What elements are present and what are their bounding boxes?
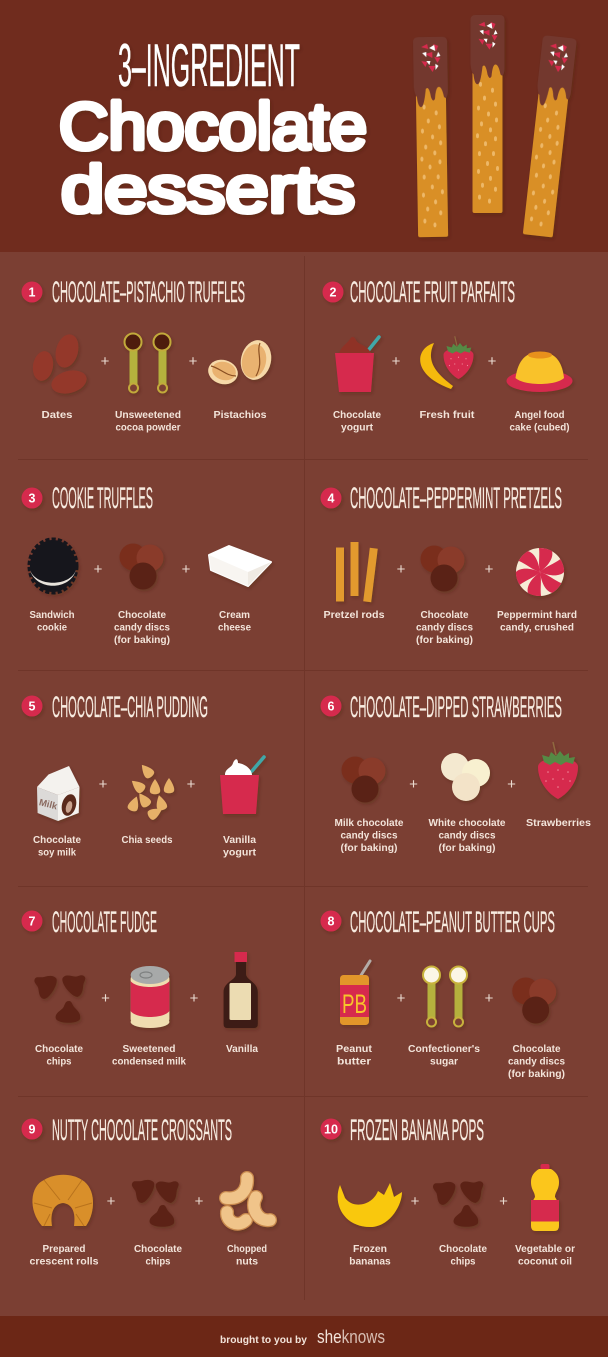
icon: vanilla yogurt: [220, 757, 264, 814]
label: milk chocolate candy discs: (for baking): [340, 842, 398, 854]
label: unsweetened cocoa powder: Unsweetened: [115, 409, 181, 421]
label: strawberries: Strawberries: [526, 817, 591, 829]
label: chocolate candy discs: candy discs: [416, 622, 473, 634]
icon: sugar spoons: [423, 966, 467, 1026]
icon: chocolate chips: [427, 1172, 490, 1227]
plus: +: [99, 776, 108, 793]
plus: +: [195, 1193, 204, 1210]
label: unsweetened cocoa powder: cocoa powder: [116, 422, 180, 434]
label: chia seeds: Chia seeds: [122, 834, 173, 846]
label: prepared crescent rolls: crescent rolls: [30, 1256, 99, 1268]
label: chocolate candy discs: (for baking): [508, 1068, 565, 1080]
label: sweetened condensed milk: [112, 1043, 186, 1068]
label: chocolate candy discs: candy discs: [114, 622, 170, 634]
panel: recipe 10: [320, 1114, 575, 1268]
badge 4: [320, 488, 342, 508]
icon: dates: [31, 332, 89, 397]
label: vegetable or coconut oil: [515, 1243, 575, 1268]
label: chocolate chips: [439, 1243, 487, 1268]
icon: milk carton: Milk: [38, 797, 59, 813]
text: NUTTY CHOCOLATE CROISSANTS: [52, 1114, 232, 1147]
label: fresh fruit: Fresh fruit: [420, 409, 475, 421]
icon: pretzel rods: [336, 542, 378, 602]
panel: recipe 1: [22, 276, 275, 434]
label: sweetened condensed milk: condensed milk: [112, 1056, 186, 1068]
panel: recipe 2: [322, 276, 572, 434]
label: chocolate candy discs: [114, 609, 170, 646]
label: chocolate soy milk: [33, 834, 81, 858]
icon: cashews: [226, 1178, 270, 1224]
label: chopped nuts: Chopped: [227, 1243, 267, 1255]
label: peppermint hard candy: candy, crushed: [500, 622, 574, 634]
label: angel food cake: cake (cubed): [510, 422, 570, 434]
icon: angel food cake: [506, 352, 572, 392]
footer credit: brought to you by: [220, 1334, 307, 1346]
plus: +: [107, 1193, 116, 1210]
plus: +: [101, 353, 110, 370]
icon: peanut butter jar: PB: [342, 989, 367, 1019]
panel: recipe 8: [320, 906, 565, 1080]
panel: recipe 9: [22, 1114, 270, 1268]
label: angel food cake: [510, 409, 570, 434]
label: chocolate candy discs: Chocolate: [512, 1043, 561, 1055]
icon: pistachios: [205, 337, 275, 387]
label: unsweetened cocoa powder: [115, 409, 181, 434]
badge 4: 4: [328, 492, 335, 506]
panel: header: [0, 0, 608, 252]
label: prepared crescent rolls: [30, 1243, 99, 1268]
label: chocolate chips: Chocolate: [134, 1243, 182, 1255]
icon: banana and strawberry: [420, 336, 474, 389]
label: vegetable or coconut oil: Vegetable or: [515, 1243, 575, 1255]
badge 8: 8: [328, 914, 335, 928]
label: milk chocolate candy discs: Milk chocolate: [334, 817, 404, 829]
label: peanut butter: butter: [337, 1056, 371, 1068]
icon: peanut butter jar: [340, 961, 370, 1025]
icon: chocolate chips: [126, 1172, 185, 1227]
label: chocolate chips: [35, 1043, 83, 1068]
label: chocolate chips: chips: [450, 1256, 476, 1268]
badge 5: 5: [29, 700, 36, 714]
label: white chocolate candy discs: (for baking): [438, 842, 496, 854]
icon: white chocolate discs: [441, 753, 490, 801]
plus: +: [187, 776, 196, 793]
label: chocolate candy discs: candy discs: [508, 1056, 565, 1068]
label: chopped nuts: nuts: [236, 1256, 258, 1268]
plus: +: [397, 990, 406, 1007]
label: peppermint hard candy: [497, 609, 577, 634]
badge 2: 2: [330, 286, 337, 300]
plus: +: [507, 776, 516, 793]
label: peanut butter: [336, 1043, 373, 1068]
label: chocolate chips: chips: [46, 1056, 72, 1068]
panel: header: 3–INGREDIENT: [118, 32, 300, 99]
label: vanilla: Vanilla: [226, 1043, 258, 1055]
label: chocolate yogurt: yogurt: [341, 422, 373, 434]
label: milk chocolate candy discs: [334, 817, 404, 854]
label: sandwich cookie: cookie: [37, 622, 67, 634]
label: chocolate candy discs: (for baking): [416, 634, 473, 646]
label: confectioner's sugar: sugar: [430, 1056, 458, 1068]
label: angel food cake: Angel food: [514, 409, 564, 421]
plus: +: [182, 561, 191, 578]
label: vanilla yogurt: Vanilla: [223, 834, 256, 846]
icon: croissant: [32, 1175, 93, 1226]
label: frozen bananas: Frozen: [353, 1243, 387, 1255]
icon: vanilla bottle: [224, 952, 258, 1028]
label: white chocolate candy discs: [428, 817, 506, 854]
badge 10: [320, 1118, 342, 1140]
icon: condensed milk can: [131, 966, 169, 1028]
label: sandwich cookie: [30, 609, 74, 634]
plus: +: [94, 561, 103, 578]
label: sandwich cookie: Sandwich: [30, 609, 74, 621]
text: CHOCOLATE–PISTACHIO TRUFFLES: [52, 276, 245, 309]
sheknows logo: sheknows: [317, 1327, 385, 1347]
label: vegetable or coconut oil: coconut oil: [518, 1256, 572, 1268]
label: prepared crescent rolls: Prepared: [42, 1243, 86, 1255]
panel: recipe 5: CHOCOLATE–CHIA PUDDING: [52, 691, 208, 724]
panel: recipe 3: COOKIE TRUFFLES: [52, 482, 153, 515]
label: chocolate chips: chips: [146, 1256, 171, 1268]
icon: strawberry: [538, 742, 578, 799]
icon: bananas: [338, 1183, 402, 1227]
label: chocolate chips: Chocolate: [35, 1043, 83, 1055]
plus: +: [392, 353, 401, 370]
badge 9: [22, 1118, 42, 1140]
label: pistachios: Pistachios: [214, 409, 267, 421]
badge 8: [320, 910, 342, 932]
icon: oil bottle: [531, 1164, 559, 1231]
vertical divider: [18, 256, 588, 1300]
plus: +: [189, 353, 198, 370]
label: frozen bananas: bananas: [349, 1256, 391, 1268]
plus: +: [409, 776, 418, 793]
plus: +: [411, 1193, 420, 1210]
label: chocolate soy milk: soy milk: [38, 846, 76, 858]
label: chocolate candy discs: Chocolate: [420, 609, 469, 621]
badge 5: [22, 696, 42, 716]
label: dates: Dates: [42, 409, 73, 421]
panel: recipe 7: CHOCOLATE FUDGE: [52, 906, 157, 939]
label: confectioner's sugar: Confectioner's: [408, 1043, 480, 1055]
icon: milk carton: [37, 766, 80, 821]
panel: recipe 3: [22, 482, 271, 646]
icon: sandwich cookie: [30, 540, 76, 592]
icon: cocoa spoons: [124, 334, 170, 392]
badge 6: 6: [328, 700, 335, 714]
plus: +: [101, 990, 110, 1007]
label: pretzel rods: Pretzel rods: [324, 609, 385, 621]
label: vanilla yogurt: yogurt: [223, 846, 257, 858]
icon: chocolate chips: [28, 966, 92, 1023]
icon: chocolate candy discs: [120, 544, 164, 590]
plus: +: [488, 353, 497, 370]
plus: +: [485, 561, 494, 578]
icon: chocolate candy discs: [512, 978, 556, 1024]
badge 2: [322, 282, 344, 302]
label: chopped nuts: [227, 1243, 267, 1268]
panel: recipe 6: [320, 691, 591, 854]
label: vanilla yogurt: [223, 834, 257, 858]
label: chocolate yogurt: Chocolate: [333, 409, 381, 421]
badge 7: 7: [29, 914, 36, 928]
label: chocolate soy milk: Chocolate: [33, 834, 81, 846]
icon: dipped pretzel rod right: [521, 35, 577, 238]
icon: milk chocolate discs: [342, 756, 386, 802]
icon: chocolate yogurt: [335, 337, 379, 392]
title: chocolate: Chocolate: [59, 89, 367, 163]
badge 10: 10: [324, 1122, 338, 1136]
badge 3: 3: [29, 492, 36, 506]
plus: +: [190, 990, 199, 1007]
label: peppermint hard candy: Peppermint hard: [497, 609, 577, 621]
label: confectioner's sugar: [408, 1043, 480, 1068]
label: white chocolate candy discs: White chocolate: [428, 817, 506, 829]
label: peanut butter: Peanut: [336, 1043, 373, 1055]
icon: dipped pretzel rod middle: [470, 15, 504, 213]
badge 6: [320, 696, 342, 716]
plus: +: [485, 990, 494, 1007]
badge 1: [22, 282, 42, 302]
label: chocolate chips: [134, 1243, 182, 1268]
label: chocolate candy discs: Chocolate: [118, 609, 166, 621]
label: cream cheese: cheese: [218, 622, 251, 634]
label: chocolate yogurt: [333, 409, 381, 434]
badge 9: 9: [29, 1122, 36, 1136]
label: chocolate candy discs: [508, 1043, 565, 1080]
label: sweetened condensed milk: Sweetened: [122, 1043, 176, 1055]
label: cream cheese: [218, 609, 251, 634]
label: frozen bananas: [349, 1243, 391, 1268]
label: chocolate candy discs: (for baking): [114, 634, 170, 646]
icon: cream cheese: [209, 546, 271, 586]
label: chocolate candy discs: [416, 609, 473, 646]
plus: +: [397, 561, 406, 578]
icon: chia seeds: [127, 762, 174, 821]
badge 3: [22, 488, 42, 508]
label: milk chocolate candy discs: candy discs: [340, 830, 398, 842]
label: chocolate chips: Chocolate: [439, 1243, 487, 1255]
panel: recipe 5: [22, 691, 264, 858]
panel: footer: [0, 1316, 608, 1357]
panel: recipe 7: [22, 906, 258, 1068]
icon: dipped pretzel rod left: [413, 37, 450, 237]
panel: recipe 4: [320, 482, 577, 646]
icon: peppermint candy: [513, 548, 567, 596]
badge 1: 1: [29, 286, 36, 300]
label: cream cheese: Cream: [219, 609, 250, 621]
plus: +: [499, 1193, 508, 1210]
title: desserts: desserts: [61, 152, 355, 226]
label: white chocolate candy discs: candy discs: [438, 830, 496, 842]
icon: chocolate candy discs: [420, 546, 464, 592]
badge 7: [22, 910, 42, 932]
